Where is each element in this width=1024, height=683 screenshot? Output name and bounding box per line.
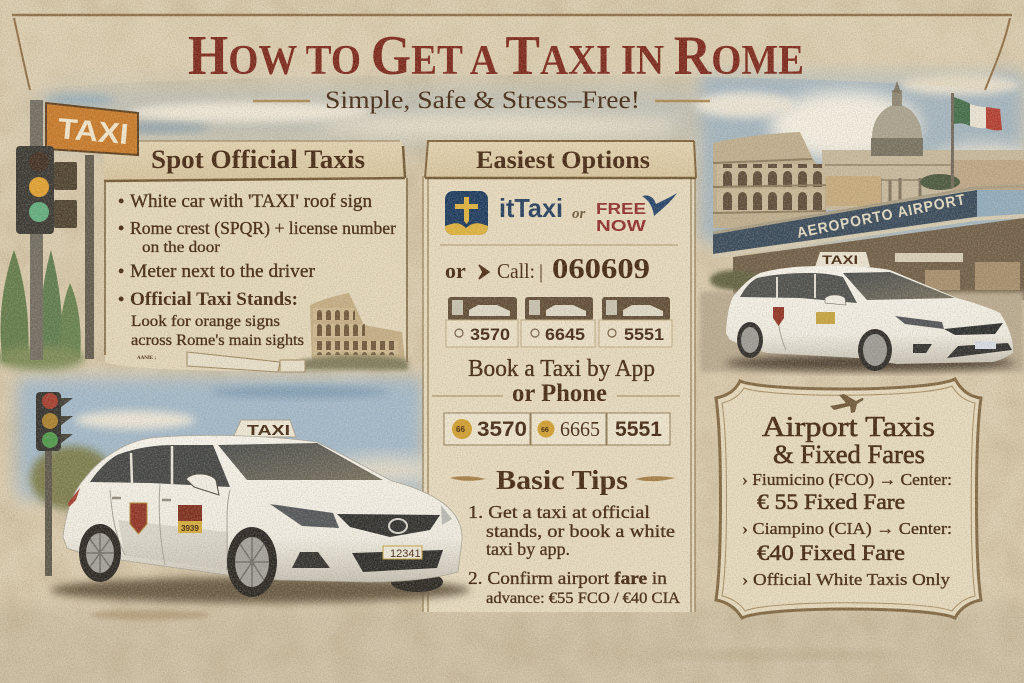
TAXI sign	[46, 103, 138, 155]
bullet list: •	[118, 289, 124, 309]
panel: spot official taxis	[103, 141, 408, 372]
title: HOW TO GET A TAXI IN ROME	[188, 25, 804, 87]
front wheel	[858, 329, 892, 371]
lower traffic light	[36, 392, 73, 576]
icon: St Peter's basilica	[822, 81, 1024, 210]
bullet list: on the door	[142, 239, 221, 256]
trees by terminal	[920, 174, 960, 190]
licence sticker	[178, 505, 202, 533]
airport terminal	[713, 186, 1024, 300]
sky: right scene	[695, 72, 1024, 242]
small caption on scroll: AANIE ;	[137, 356, 156, 361]
card: taxi 3570: 3570	[470, 325, 510, 344]
signal lamps	[29, 152, 49, 222]
signal lamps	[42, 393, 58, 448]
licence sticker: 3939	[181, 524, 199, 533]
ground patches	[90, 610, 910, 660]
phone number cards: 66	[456, 425, 465, 434]
door crest	[130, 503, 147, 534]
bullet list: Rome crest (SPQR) + license number	[130, 218, 396, 238]
card: taxi 6645	[521, 297, 595, 347]
call line: Call:	[497, 259, 535, 283]
icon: itTaxi app	[445, 191, 488, 235]
sky: lower left scene	[18, 378, 440, 498]
card: taxi 3570	[446, 297, 518, 347]
cypress trees	[0, 250, 85, 370]
bullet list: •	[118, 261, 124, 281]
licence plate on door	[816, 312, 835, 324]
Free Now logo	[596, 193, 677, 235]
paper scroll	[187, 352, 305, 372]
door reflection	[118, 520, 228, 570]
heading: basic tips: Basic Tips	[496, 465, 628, 495]
tips list	[468, 502, 680, 607]
door crest	[773, 307, 784, 326]
licence plate: 12341	[390, 548, 421, 560]
card: taxi 5551: 5551	[624, 325, 664, 344]
phone number cards: 5551	[615, 418, 662, 441]
heading: book a taxi: or Phone	[512, 380, 607, 407]
heading: book a taxi: Book a Taxi by App	[468, 356, 655, 382]
call line: |	[539, 261, 543, 283]
panel heading: Spot Official Taxis	[151, 145, 365, 174]
TAXI sign: TAXI	[56, 113, 130, 151]
licence plate	[383, 546, 422, 560]
fog lamp	[292, 552, 330, 568]
bullet list: •	[118, 191, 124, 211]
call line: 060609	[552, 253, 650, 285]
headlight	[270, 504, 339, 528]
heading: book a taxi	[432, 356, 680, 407]
icon: plane	[830, 394, 864, 413]
icon: Colosseum	[713, 132, 826, 228]
roof sign	[233, 420, 296, 439]
car body	[63, 435, 462, 582]
heading: basic tips	[450, 465, 675, 495]
call line: or	[445, 258, 466, 283]
tips list: 1. Get a taxi at official	[468, 502, 650, 522]
tips list: 2. Confirm airport fare in	[468, 568, 667, 588]
fare list: €40 Fixed Fare	[757, 540, 905, 565]
phone number cards: 6665	[560, 417, 600, 441]
bullet list	[118, 191, 396, 349]
sky band behind title	[40, 85, 700, 145]
phone number cards: 66	[541, 427, 549, 434]
card: taxi 5551	[599, 297, 672, 347]
left taxi	[50, 420, 470, 603]
mirror	[186, 474, 219, 495]
phone number cards: 3570	[477, 418, 527, 441]
right scene: Rome skyline and airport	[700, 81, 1024, 372]
lower grille	[352, 550, 443, 572]
grille	[337, 514, 440, 537]
right taxi	[725, 252, 1015, 371]
bush behind left taxi	[30, 446, 114, 510]
subtitle: Simple, Safe & Stress–Free!	[325, 87, 640, 114]
roof sign: TAXI	[822, 253, 858, 267]
call line	[445, 253, 650, 285]
title banner	[12, 15, 1012, 90]
side windows	[90, 445, 230, 487]
panel heading: & Fixed Fares	[773, 440, 925, 469]
fare list: › Official White Taxis Only	[742, 570, 951, 589]
bullet list: Look for orange signs	[131, 313, 280, 330]
airport sign: AEROPORTO AIRPORT	[795, 191, 967, 242]
panel heading: Airport Taxis	[762, 412, 935, 443]
roof sign	[815, 252, 870, 267]
phone number cards	[444, 413, 670, 445]
rear wheel	[737, 322, 763, 358]
far front wheel	[391, 572, 443, 592]
fare list: › Fiumicino (FCO) → Center:	[742, 470, 952, 489]
icon: small Colosseum	[300, 293, 408, 370]
panel: easiest options	[423, 141, 696, 612]
Free Now logo: NOW	[596, 218, 647, 235]
tips list: advance: €55 FCO / €40 CIA	[486, 590, 680, 607]
icon: Italian flag	[951, 93, 1002, 188]
fare list	[742, 470, 952, 589]
panel heading: Easiest Options	[476, 147, 650, 174]
bullet list: Meter next to the driver	[130, 262, 315, 282]
fare list: € 55 Fixed Fare	[757, 489, 905, 514]
header plank	[425, 141, 696, 178]
windshield	[218, 443, 383, 480]
bullet list: White car with 'TAXI' roof sign	[130, 192, 372, 212]
bullet list: Official Taxi Stands:	[130, 289, 298, 310]
panel: airport taxis and fixed fares	[716, 379, 981, 618]
rear wheel	[79, 524, 121, 582]
Free Now logo: FREE	[596, 201, 646, 218]
panel heading	[762, 412, 935, 469]
traffic light with TAXI sign	[16, 100, 138, 360]
fare list: › Ciampino (CIA) → Center:	[742, 519, 952, 538]
card: taxi 6645: 6645	[545, 325, 585, 344]
itTaxi wordmark: itTaxi	[499, 193, 563, 223]
bullet list: •	[118, 218, 124, 238]
header plank	[103, 141, 405, 181]
tips list: taxi by app.	[486, 539, 570, 559]
or: or	[572, 206, 586, 222]
bullet list: across Rome's main sights	[131, 332, 304, 349]
tips list: stands, or book a white	[486, 521, 675, 541]
roof sign: TAXI	[247, 422, 290, 439]
front wheel	[227, 527, 277, 597]
